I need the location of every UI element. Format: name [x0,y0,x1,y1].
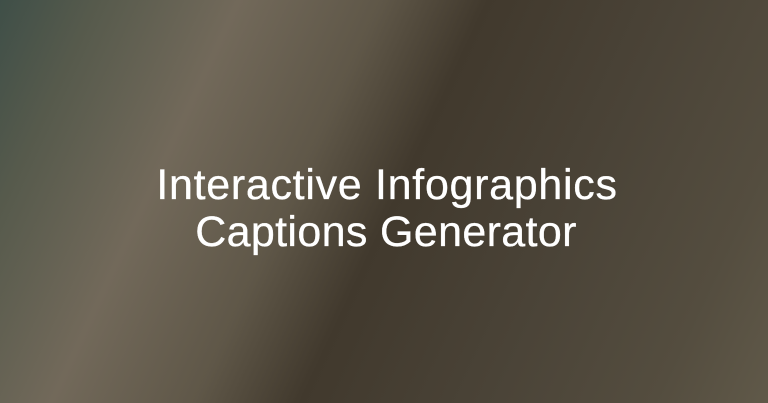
title: Captions Generator [195,208,577,256]
title: Interactive Infographics [156,161,618,209]
title [156,161,618,256]
